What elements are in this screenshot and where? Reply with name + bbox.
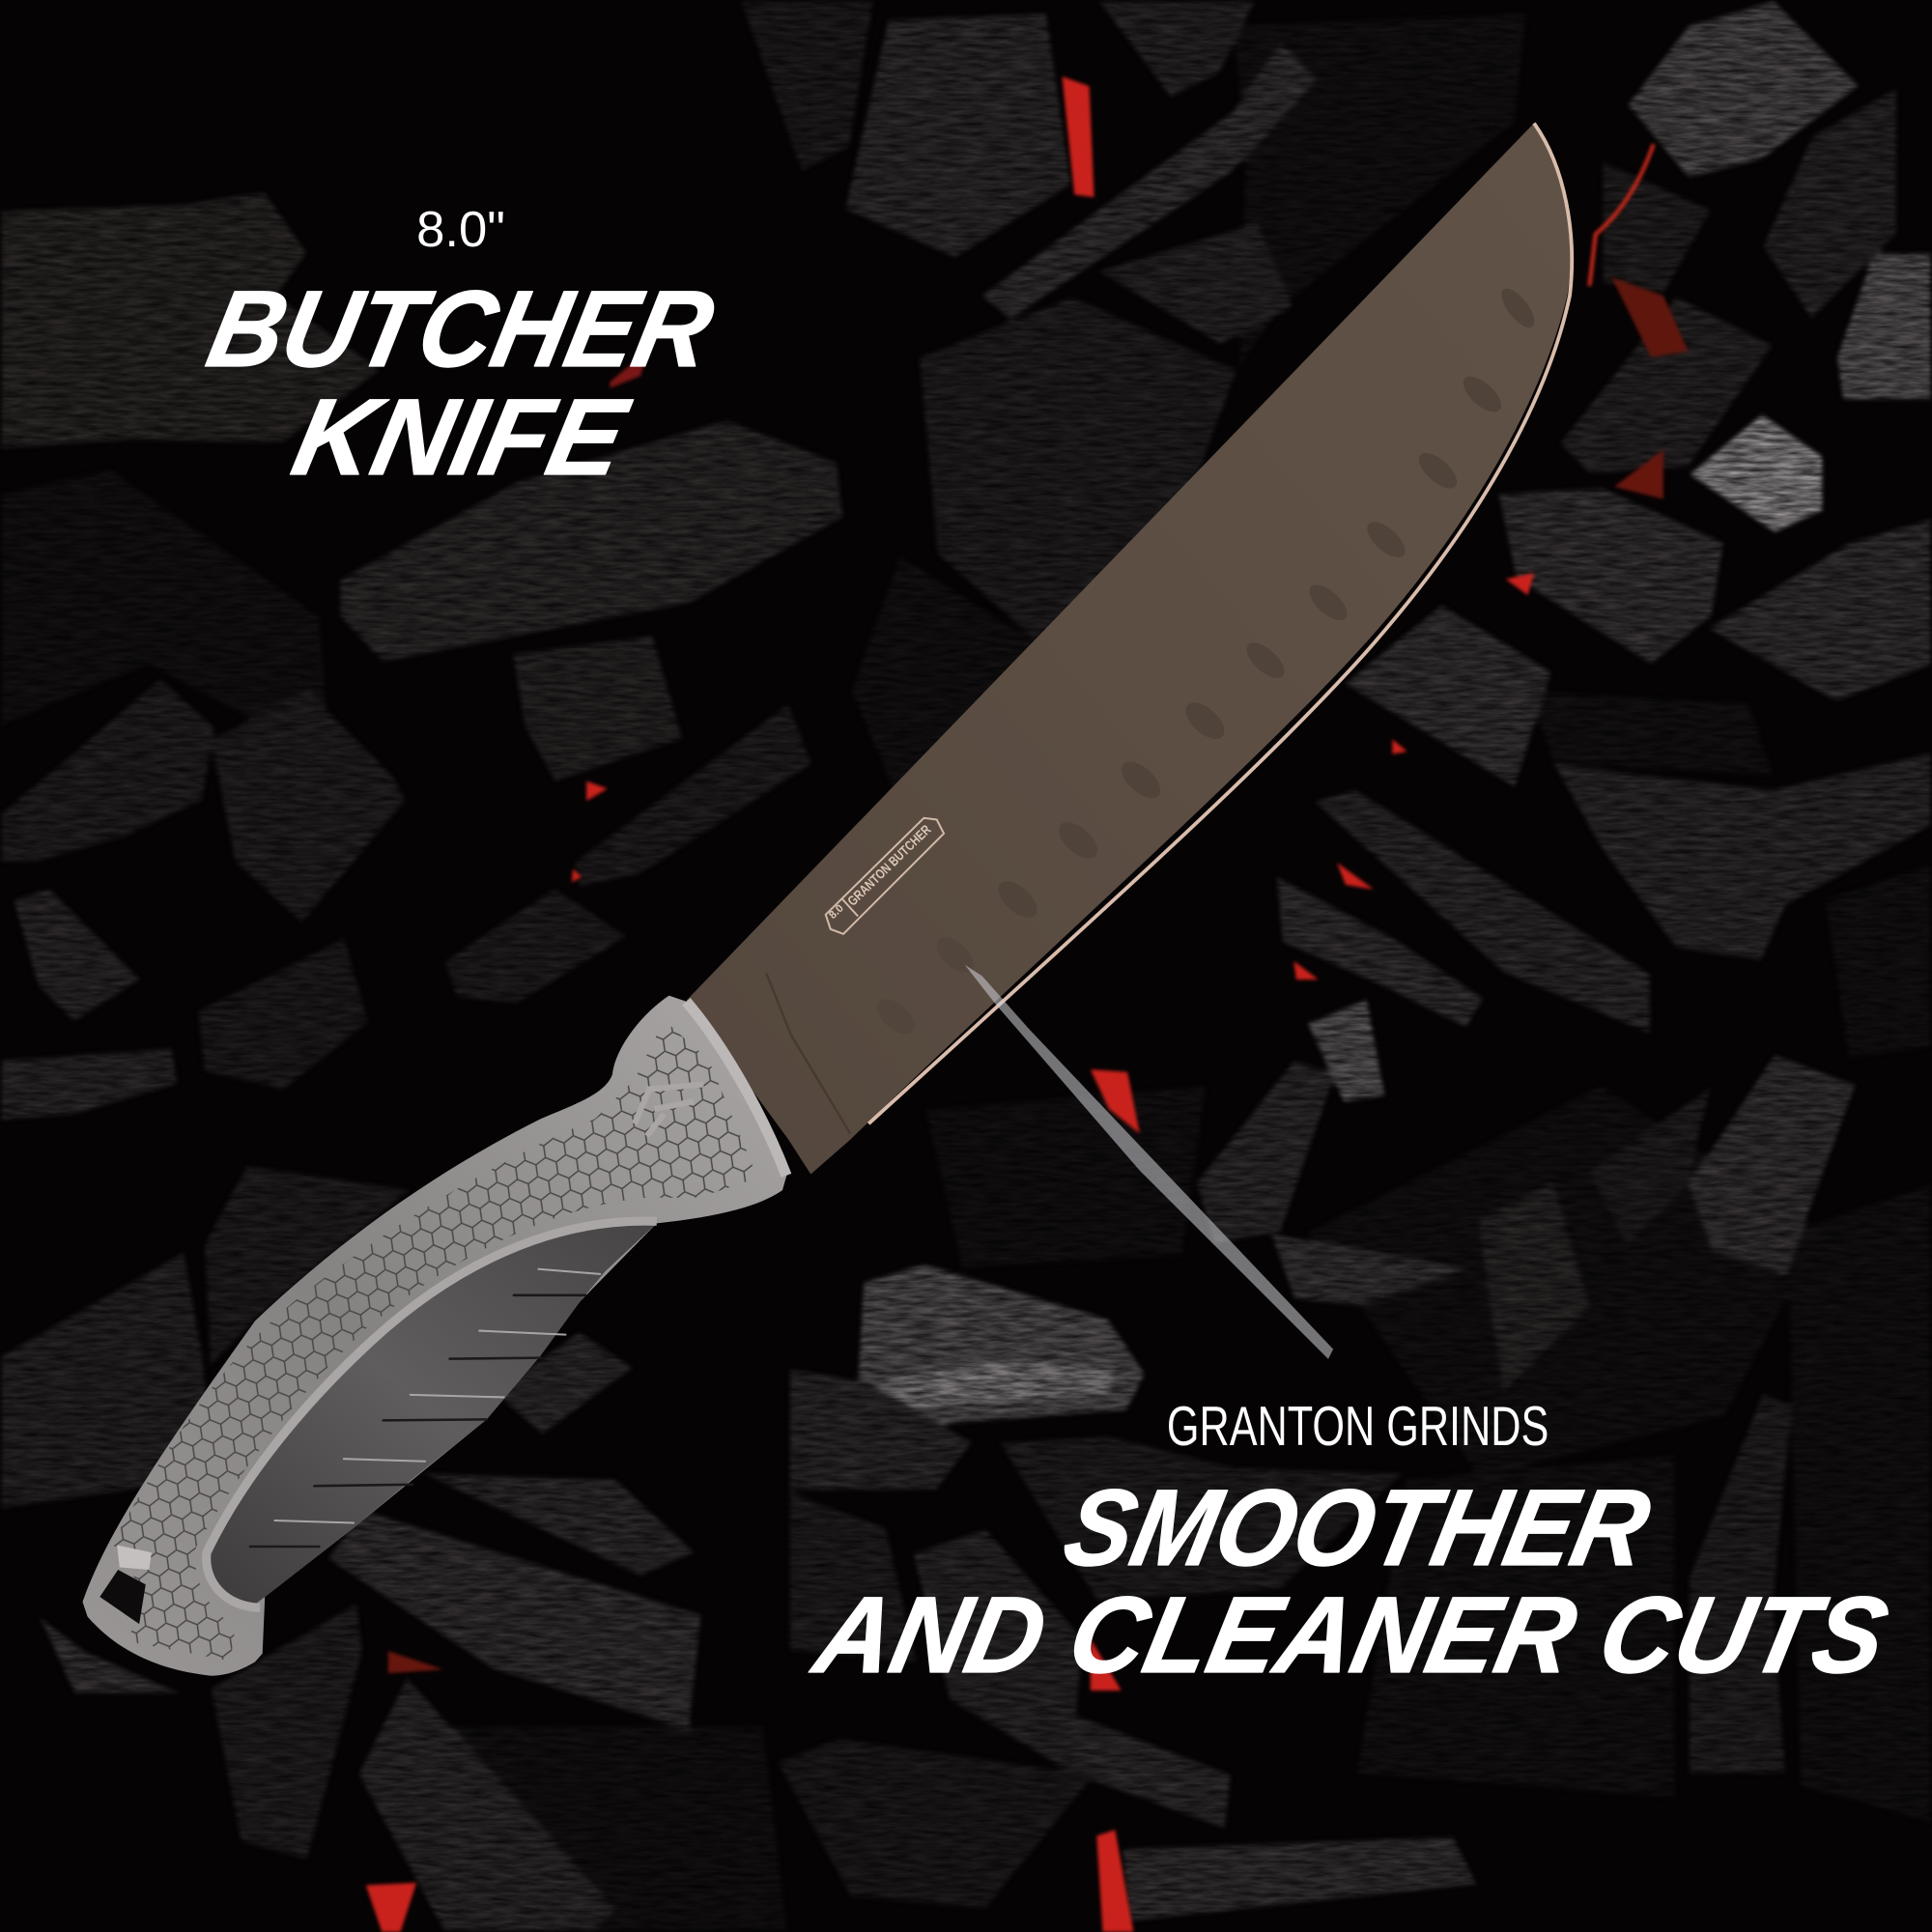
lanyard hole [99, 1545, 152, 1624]
callout pointer slash [965, 965, 1333, 1359]
granton scallops [871, 283, 1540, 1040]
glowing embers [366, 76, 1688, 1932]
title line 1: BUTCHER [198, 269, 724, 390]
feature line 2: AND CLEANER CUTS [803, 1575, 1897, 1696]
logo emblem [635, 1084, 703, 1136]
rubber grip inset [207, 1221, 657, 1607]
blade etched label [826, 818, 944, 934]
feature callout [803, 1396, 1897, 1696]
blade [686, 124, 1572, 1175]
title block [198, 202, 724, 498]
feature subtitle: GRANTON GRINDS [1167, 1396, 1548, 1458]
knife [58, 124, 1572, 1739]
feature line 1: SMOOTHER [1055, 1467, 1660, 1589]
size label: 8.0" [416, 202, 505, 258]
blade etched label: GRANTON BUTCHER [844, 821, 934, 909]
hexagon grip texture [114, 1026, 753, 1660]
handle [83, 995, 792, 1676]
title line 2: KNIFE [283, 377, 639, 498]
blade etched label: 8.0 [827, 902, 846, 922]
